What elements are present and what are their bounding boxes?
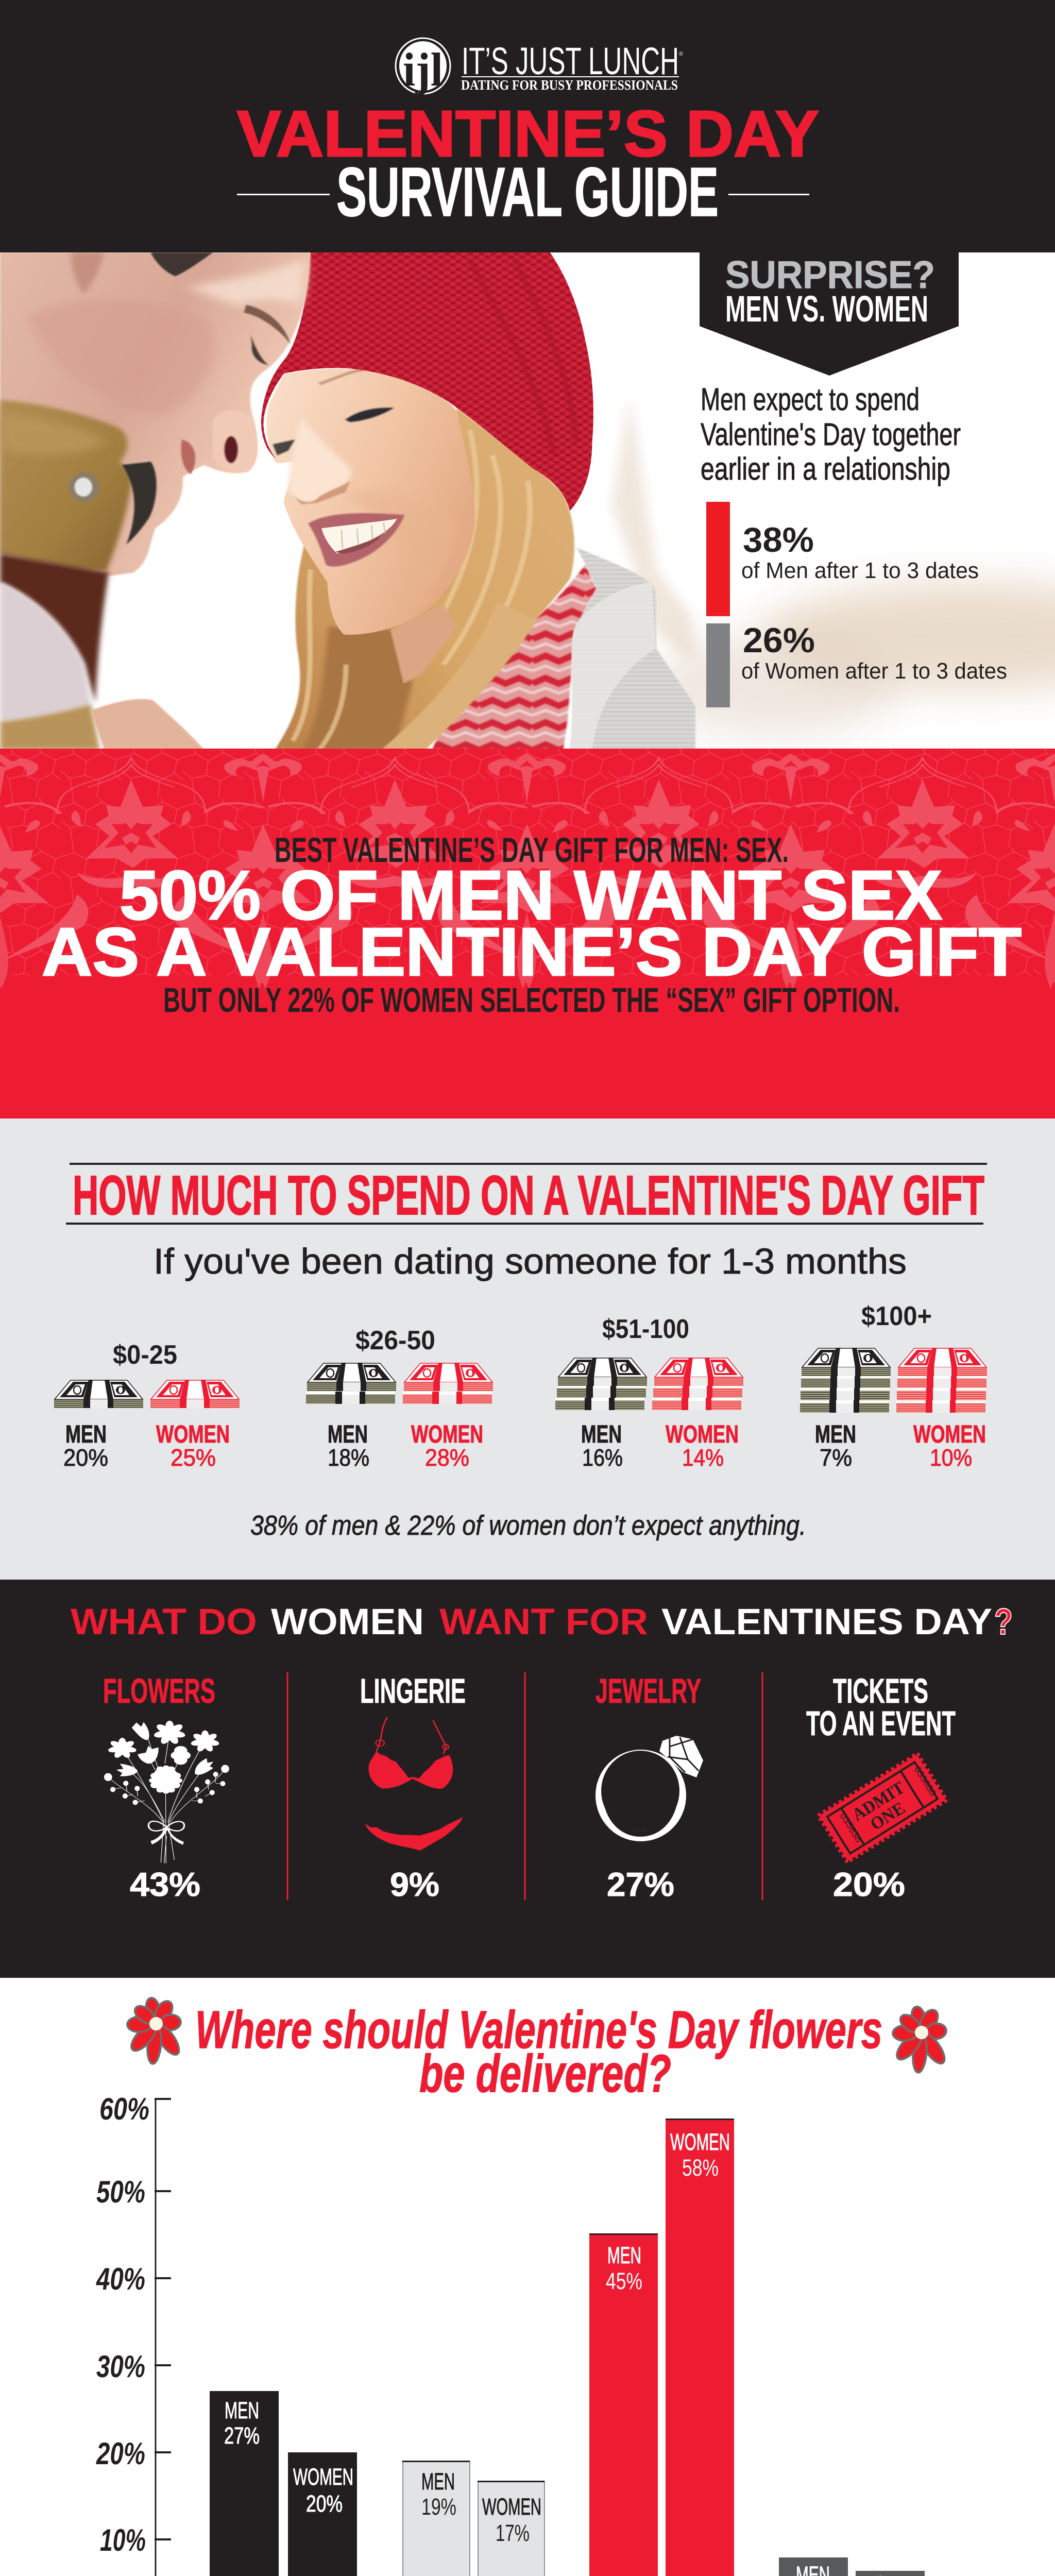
- heading: what do women want: ?: [994, 1602, 1013, 1642]
- logo: It's Just Lunch: ijl: [403, 43, 443, 96]
- column: $100+: [800, 1301, 987, 1471]
- column: $100+: WOMEN: [913, 1421, 986, 1448]
- logo: It's Just Lunch: IT’S JUST LUNCH: [462, 40, 679, 82]
- chart: y axis: [96, 2092, 171, 2576]
- column: tickets: TICKETS: [833, 1672, 928, 1710]
- icon: flower left: [127, 1996, 183, 2064]
- column: lingerie: [360, 1672, 466, 1903]
- hair: [275, 408, 574, 750]
- column: $100+: $100+: [861, 1301, 932, 1331]
- icon: money stack men: [54, 1380, 143, 1408]
- bars: in person: 45%: [606, 2268, 642, 2294]
- column: $0-25: WOMEN: [156, 1421, 230, 1448]
- bars: the home: [402, 2461, 544, 2576]
- text: relationship statement: Men expect to spend: [701, 382, 920, 417]
- callout: Surprise? Men vs. Women: [700, 252, 959, 376]
- panel: how much to spend: [0, 1118, 1055, 1580]
- title: Valentine's Day: VALENTINE’S DAY: [237, 97, 819, 170]
- stat: 26% of women: of Women after 1 to 3 dates: [741, 658, 1007, 684]
- column: lingerie: 9%: [390, 1866, 439, 1903]
- callout: Surprise? Men vs. Women: MEN VS. WOMEN: [725, 289, 928, 330]
- bars: the home: MEN: [421, 2468, 455, 2495]
- note: no expectation: 38% of men & 22% of women don’t expect anything.: [250, 1510, 806, 1541]
- background blur: [612, 395, 695, 665]
- icon: admit one ticket: ONE: [867, 1799, 909, 1834]
- column: flowers: 43%: [130, 1866, 200, 1903]
- column: jewelry: [595, 1672, 703, 1903]
- heading: what do women want: [71, 1602, 1013, 1642]
- icon: admit one ticket: [818, 1753, 947, 1862]
- jacket lower: [0, 554, 109, 703]
- column: $0-25: [54, 1340, 240, 1471]
- logo: It's Just Lunch: DATING FOR BUSY PROFESSIONALS: [461, 77, 678, 93]
- column: $51-100: MEN: [581, 1421, 622, 1448]
- bars: the home: WOMEN: [482, 2494, 541, 2520]
- column: jewelry: 27%: [607, 1866, 674, 1903]
- woman's face: [267, 369, 475, 635]
- heading: what do women want: WANT FOR: [439, 1602, 648, 1642]
- chart: y axis: 30%: [96, 2349, 145, 2384]
- stat: 26% of women: [706, 621, 1007, 707]
- collar: [0, 400, 133, 571]
- bars: in person: MEN: [607, 2242, 641, 2268]
- eyes: [345, 408, 394, 422]
- heading: what do women want: VALENTINES DAY: [661, 1602, 992, 1642]
- panel: flower delivery chart: [96, 1996, 965, 2576]
- icon: admit one ticket: 035638: [838, 1811, 864, 1844]
- panel: best gift for men: [0, 749, 1055, 1118]
- stat: 38% of men: 38%: [743, 520, 814, 560]
- icon: money stack women: [896, 1348, 987, 1413]
- bars: the office: WOMEN: [293, 2464, 353, 2490]
- heading: where should flowers be delivered: be delivered?: [419, 2044, 671, 2103]
- bars: the office: 20%: [306, 2490, 343, 2517]
- chart: y axis: 40%: [96, 2262, 145, 2296]
- mouth: [308, 513, 404, 567]
- man's nose and lips: [212, 410, 258, 472]
- column: $26-50: [306, 1326, 493, 1471]
- column: $0-25: MEN: [65, 1421, 107, 1448]
- man's face: [0, 252, 311, 576]
- subheading: If you've been dating someone for 1-3 months: [154, 1241, 907, 1281]
- logo: It's Just Lunch: ®: [679, 51, 683, 57]
- column: $26-50: 28%: [425, 1444, 469, 1471]
- bars: not into flowers: [779, 2557, 925, 2576]
- icon: money stack men: [306, 1363, 396, 1404]
- column: $51-100: 16%: [582, 1444, 623, 1471]
- heading: where should flowers be delivered: [127, 1996, 949, 2103]
- headline: 50% of men want sex as a gift: 50% OF MEN WANT SEX: [120, 856, 942, 934]
- bars: the office: 27%: [224, 2422, 260, 2449]
- icon: bra and panties: [365, 1717, 463, 1851]
- subtitle: Survival Guide: SURVIVAL GUIDE: [336, 153, 719, 231]
- column: tickets: TO AN EVENT: [806, 1704, 956, 1743]
- text: relationship statement: earlier in a relationship: [701, 451, 950, 486]
- headline: 50% of men want sex as a gift: AS A VALENTINE’S DAY GIFT: [42, 914, 1022, 990]
- column: tickets: [806, 1672, 956, 1903]
- text: best gift: BEST VALENTINE’S DAY GIFT FOR MEN: SEX.: [275, 831, 789, 870]
- icon: bouquet: [104, 1721, 229, 1863]
- chart: y axis: 10%: [100, 2523, 146, 2557]
- hat: [261, 252, 593, 511]
- column: flowers: [103, 1672, 229, 1903]
- logo: It's Just Lunch: [396, 38, 683, 96]
- headline: 50% of men want sex as a gift: [42, 856, 1022, 990]
- chart: y axis: 20%: [96, 2436, 145, 2471]
- column: $0-25: 20%: [63, 1444, 108, 1471]
- column: $26-50: 18%: [328, 1444, 369, 1471]
- bars: the office: [210, 2391, 357, 2576]
- neck: [390, 604, 457, 684]
- column: $26-50: MEN: [328, 1421, 368, 1448]
- icon: money stack men: [800, 1348, 891, 1413]
- column: $100+: 7%: [820, 1444, 852, 1471]
- bars: in person: WOMEN: [670, 2129, 730, 2155]
- bars: the home: 19%: [421, 2494, 456, 2520]
- heading: what do women want: WOMEN: [271, 1602, 424, 1642]
- chart: y axis: 60%: [99, 2092, 149, 2126]
- panel: what do women want: [0, 1580, 1055, 1978]
- subtitle: Survival Guide: [237, 153, 809, 231]
- panel: header: [0, 0, 1055, 252]
- text: relationship statement: [701, 382, 961, 486]
- column: $51-100: $51-100: [602, 1314, 689, 1344]
- heading: what do women want: WHAT DO: [71, 1602, 257, 1642]
- column: $51-100: WOMEN: [666, 1421, 739, 1448]
- stat: 26% of women: 26%: [743, 621, 815, 660]
- icon: money stack men: [555, 1358, 647, 1410]
- icon: admit one ticket: ADMIT: [849, 1778, 908, 1825]
- text: relationship statement: Valentine's Day together: [701, 417, 961, 452]
- callout: Surprise? Men vs. Women: SURPRISE?: [725, 253, 935, 296]
- icon: admit one ticket: 035638: [912, 1765, 939, 1798]
- bars: the office: MEN: [225, 2397, 259, 2424]
- column: $100+: 10%: [930, 1444, 972, 1471]
- stat: 38% of men: [706, 502, 979, 616]
- front hair strand: [381, 601, 537, 750]
- coat: [570, 547, 695, 750]
- column: $51-100: 14%: [682, 1444, 724, 1471]
- icon: money stack women: [403, 1363, 493, 1404]
- icon: flower right: [893, 2005, 949, 2073]
- bars: in person: 58%: [682, 2155, 719, 2181]
- column: $100+: MEN: [815, 1421, 856, 1448]
- icon: money stack women: [150, 1380, 240, 1408]
- column: $51-100: [555, 1314, 743, 1471]
- column: tickets: 20%: [833, 1866, 905, 1903]
- column: jewelry: JEWELRY: [595, 1672, 701, 1710]
- chart: y axis: 50%: [96, 2175, 145, 2209]
- man's brow and eye: [244, 305, 291, 344]
- column: flowers: FLOWERS: [103, 1672, 215, 1710]
- panel: couple photo illustration: [0, 252, 1055, 750]
- bars: the home: 17%: [496, 2520, 530, 2546]
- bars: in person: [589, 2119, 734, 2576]
- icon: money stack women: [652, 1358, 743, 1410]
- column: $26-50: WOMEN: [411, 1421, 483, 1448]
- stat: 38% of men: of Men after 1 to 3 dates: [741, 558, 979, 583]
- column: $26-50: $26-50: [355, 1326, 435, 1355]
- column: $0-25: 25%: [171, 1444, 216, 1471]
- column: $0-25: $0-25: [113, 1340, 177, 1370]
- icon: diamond ring: [595, 1736, 703, 1841]
- scarf: [432, 565, 597, 750]
- column: lingerie: LINGERIE: [360, 1672, 466, 1710]
